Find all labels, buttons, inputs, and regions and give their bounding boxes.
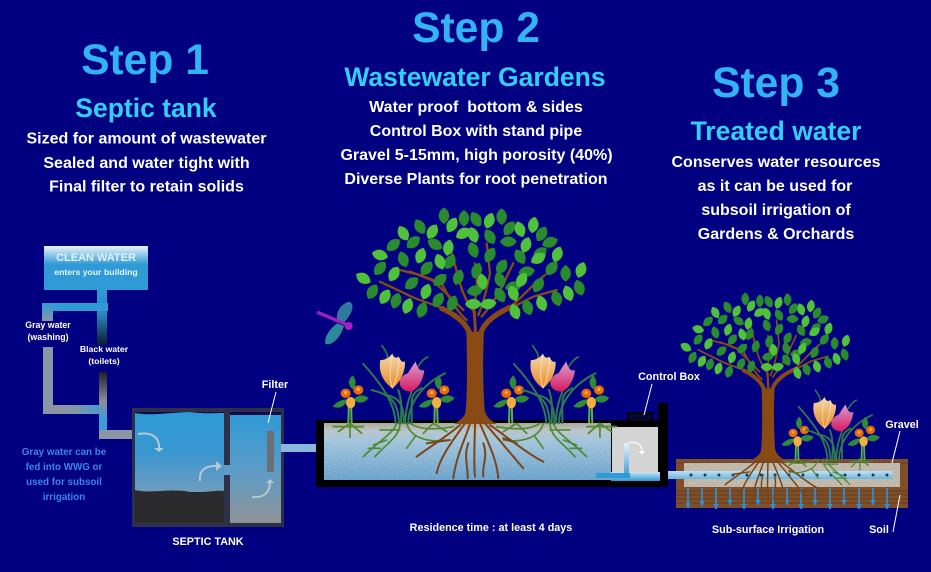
clean water box: CLEAN WATER [56, 252, 136, 264]
label: black water [80, 344, 129, 366]
body: treated water notes [672, 154, 881, 243]
subheading: Septic tank: Septic tank [75, 93, 217, 123]
label: gravel: Gravel [885, 419, 919, 431]
outlet pipe from septic tank [281, 444, 317, 452]
flowers: treated water [781, 390, 880, 460]
tree: garden [333, 207, 617, 478]
note: gray water use: irrigation [43, 492, 85, 503]
step 3 text block [672, 59, 881, 243]
note: gray water use [22, 447, 107, 503]
body: septic tank notes [26, 130, 267, 196]
tree: treated water [679, 292, 872, 501]
body: treated water notes: Gardens & Orchards [698, 226, 854, 243]
body: garden notes: Water proof bottom & sides [369, 99, 583, 116]
clean water box [44, 246, 148, 290]
dragonfly [318, 302, 353, 344]
filter [267, 431, 274, 472]
step 2 text block [340, 4, 613, 188]
label: soil: Soil [869, 524, 889, 536]
body: treated water notes: as it can be used for [698, 178, 852, 195]
label: gray water: (washing) [27, 332, 69, 342]
control box [596, 403, 668, 487]
label: black water: Black water [80, 344, 129, 354]
body: treated water notes: Conserves water resources [672, 154, 881, 171]
subheading: Wastewater Gardens: Wastewater Gardens [344, 62, 606, 92]
flowers: garden [333, 345, 609, 423]
outlet pipe to irrigation bed [668, 471, 678, 479]
body: garden notes: Control Box with stand pipe [370, 123, 582, 140]
label: black water: (toilets) [88, 356, 120, 366]
body: garden notes: Diverse Plants for root penetration [344, 171, 608, 188]
septic tank diagram [132, 408, 284, 527]
label: filter [262, 379, 289, 423]
note: gray water use: fed into WWG or [26, 462, 103, 473]
plumbing pipes [42, 290, 135, 439]
heading: Step 2: Step 2 [412, 4, 540, 52]
clean water box: enters your building [54, 267, 138, 277]
wastewater garden bed [316, 420, 668, 487]
label: control box: Control Box [638, 371, 700, 383]
body: garden notes [340, 99, 613, 188]
label: gray water: Gray water [25, 320, 71, 330]
step 1 text block [26, 36, 267, 196]
irrigation arrows [688, 488, 887, 509]
irrigation bed: soil and gravel [668, 459, 908, 509]
body: garden notes: Gravel 5-15mm, high porosity (40%) [340, 147, 613, 164]
heading: Step 1: Step 1 [81, 36, 209, 84]
label: gray water [25, 320, 71, 342]
body: septic tank notes: Sized for amount of wastewater [26, 130, 267, 148]
distribution pipe [668, 471, 892, 479]
heading: Step 3: Step 3 [712, 59, 840, 107]
note: gray water use: Gray water can be [22, 447, 107, 458]
note: gray water use: used for subsoil [26, 477, 102, 488]
label: control box [638, 371, 700, 415]
subheading: Treated water: Treated water [691, 116, 861, 146]
label: gravel [885, 419, 919, 463]
flow arrows [138, 434, 270, 497]
label: septic tank: SEPTIC TANK [172, 536, 244, 548]
body: septic tank notes: Sealed and water tight with [43, 155, 250, 172]
label: soil [869, 495, 900, 536]
body: septic tank notes: Final filter to retain solids [49, 178, 244, 196]
label: filter: Filter [262, 379, 289, 391]
label: residence time: Residence time : at least 4 days [410, 522, 572, 534]
label: sub-surface irrigation: Sub-surface Irrigation [712, 524, 824, 536]
body: treated water notes: subsoil irrigation of [701, 202, 851, 219]
